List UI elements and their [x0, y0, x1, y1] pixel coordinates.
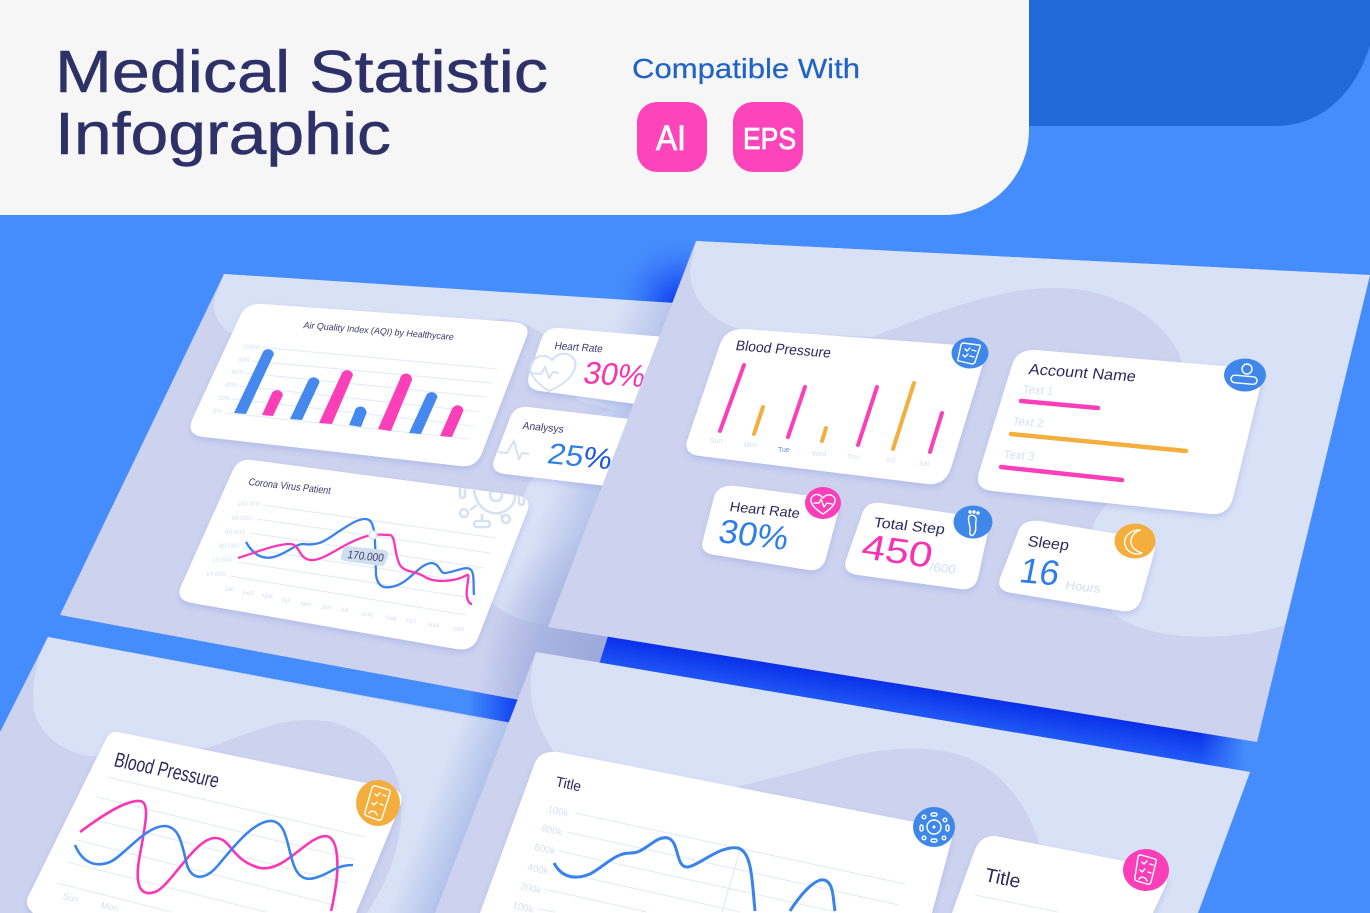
title: Infographic: [55, 101, 391, 167]
shadow on blue band above panel: [610, 234, 754, 378]
icon: virus badge: [913, 807, 955, 847]
axis labels: Oct: [406, 618, 416, 625]
total: /600: [928, 560, 957, 577]
badge: AI: AI: [656, 119, 686, 158]
axis labels: 400k: [526, 862, 549, 877]
icon: heart badge: [805, 487, 841, 519]
axis labels: Nov: [428, 622, 440, 629]
card title: Account Name: [1027, 361, 1138, 385]
day labels: Tue: [778, 447, 790, 454]
axis labels: 200k: [519, 881, 542, 896]
value: 16: [1016, 550, 1063, 593]
axis labels: [206, 501, 465, 633]
label: Analysys: [521, 420, 565, 436]
label: Heart Rate: [553, 340, 604, 355]
axis labels: 80%: [238, 358, 251, 364]
text labels: [1002, 383, 1055, 463]
card title: Title: [554, 774, 583, 795]
axis labels: Mei: [301, 601, 311, 608]
badge: AI: [637, 102, 707, 172]
axis labels: Jan: [224, 586, 235, 593]
bars: [234, 349, 464, 437]
icon: moon badge: [1114, 524, 1156, 558]
axis labels: 20.000: [212, 557, 232, 564]
card: blood pressure waves: [27, 732, 402, 913]
card title: Corona Virus Patient: [247, 477, 332, 497]
pink line: [238, 535, 472, 604]
compatible with heading: Compatible With: [632, 53, 860, 84]
card: corona virus patient line chart: [179, 460, 528, 650]
axis labels: 800k: [540, 823, 563, 838]
card: sleep: [999, 521, 1156, 611]
axis labels: 20%: [218, 396, 231, 402]
text labels: Text 3: [1002, 448, 1036, 463]
data point: [369, 531, 377, 539]
icon: foot badge: [954, 506, 992, 538]
axis labels: 60%: [232, 370, 245, 376]
day labels: Sat: [919, 461, 930, 468]
panel: lower right charts: [435, 652, 1250, 913]
title: Medical Statistic: [55, 39, 548, 105]
grid lines: [225, 347, 497, 439]
card: title mini chart: [952, 836, 1169, 913]
pink wave: [80, 801, 337, 911]
grid lines: [57, 777, 365, 912]
axis labels: 10.000: [206, 571, 226, 578]
text labels: Text 2: [1011, 415, 1045, 430]
card: title line chart: [480, 752, 955, 913]
axis labels: Sep: [385, 615, 397, 622]
shadow on blue band between lower panels: [450, 687, 525, 729]
card: analysys mini: [493, 407, 680, 490]
progress bars: [1001, 401, 1186, 480]
bars: [720, 365, 942, 452]
axis labels: 60.000: [225, 529, 245, 536]
shadow strip under main panel: [594, 630, 1285, 790]
icon: checklist badge: [1123, 849, 1169, 891]
axis labels: Jun: [321, 604, 332, 611]
title: [55, 39, 548, 167]
axis labels: 40%: [225, 383, 238, 389]
day labels: [710, 438, 930, 468]
value: 25%: [544, 437, 616, 476]
value: 30%: [580, 355, 649, 394]
axis labels: 40.000: [219, 543, 239, 550]
icon: faded pulse: [498, 441, 529, 459]
axis labels: Des: [453, 626, 465, 633]
day labels: Sun: [61, 891, 80, 904]
badge: EPS: EPS: [743, 121, 796, 156]
card title: Blood Pressure: [734, 338, 833, 362]
blue line: [246, 519, 474, 595]
card: account name: [978, 350, 1266, 514]
value: 450: [858, 526, 936, 576]
chart title: Air Quality Index (AQI) by Healthycare: [303, 320, 455, 342]
axis labels: Jul: [340, 607, 349, 614]
icon: faded heart: [531, 354, 575, 391]
icon: checklist badge: [356, 780, 400, 826]
blue wave: [75, 821, 353, 879]
grid lines: [230, 505, 496, 615]
card: heart rate: [702, 486, 841, 570]
panel: header: [0, 0, 1029, 215]
tooltip: [341, 546, 388, 566]
axis labels: Mar: [262, 593, 274, 600]
blue line: [554, 838, 835, 911]
dark blue corner shape: [1029, 0, 1370, 126]
text labels: Text 1: [1021, 383, 1055, 398]
icon: person badge: [1224, 358, 1266, 392]
card: air quality bar chart: [190, 304, 528, 466]
day labels: Fri: [887, 458, 896, 465]
label: Total Step: [872, 515, 946, 538]
axis labels: 80.000: [232, 515, 252, 522]
icon: faded virus: [460, 486, 524, 527]
grid lines: [538, 813, 905, 912]
day labels: Sun: [710, 438, 723, 445]
unit: Hours: [1064, 578, 1102, 596]
card: heart rate mini: [528, 328, 700, 410]
card title: Title: [983, 864, 1023, 893]
day labels: Mon: [744, 442, 758, 449]
day labels: Thu: [847, 454, 859, 461]
axis labels: 0%: [213, 409, 222, 415]
card: total step: [845, 503, 992, 589]
grid lines: [975, 895, 1058, 912]
axis labels: Feb: [243, 590, 255, 597]
axis labels: 100k: [546, 804, 569, 819]
axis labels: 100%: [243, 345, 259, 351]
card title: Blood Pressure: [112, 749, 222, 793]
label: Sleep: [1026, 533, 1071, 554]
axis labels: Aug: [361, 611, 373, 618]
value: 30%: [715, 513, 792, 558]
label: Heart Rate: [728, 499, 801, 521]
axis labels: Apr: [281, 597, 292, 604]
badge: EPS: [733, 102, 803, 172]
axis labels: [213, 345, 259, 415]
axis labels: 600k: [533, 842, 556, 857]
axis labels: 100.000: [237, 501, 261, 508]
card: blood pressure bars: [686, 329, 988, 484]
panel: lower left line chart: [0, 637, 560, 913]
axis labels: [511, 804, 569, 913]
day labels: [61, 891, 120, 913]
icon: checklist badge: [952, 338, 988, 368]
tooltip: 170.000: [346, 549, 385, 565]
panel: blood pressure dashboard: [548, 241, 1370, 742]
day labels: Wed: [812, 451, 826, 458]
panel: air quality and corona dashboard: [60, 274, 672, 700]
